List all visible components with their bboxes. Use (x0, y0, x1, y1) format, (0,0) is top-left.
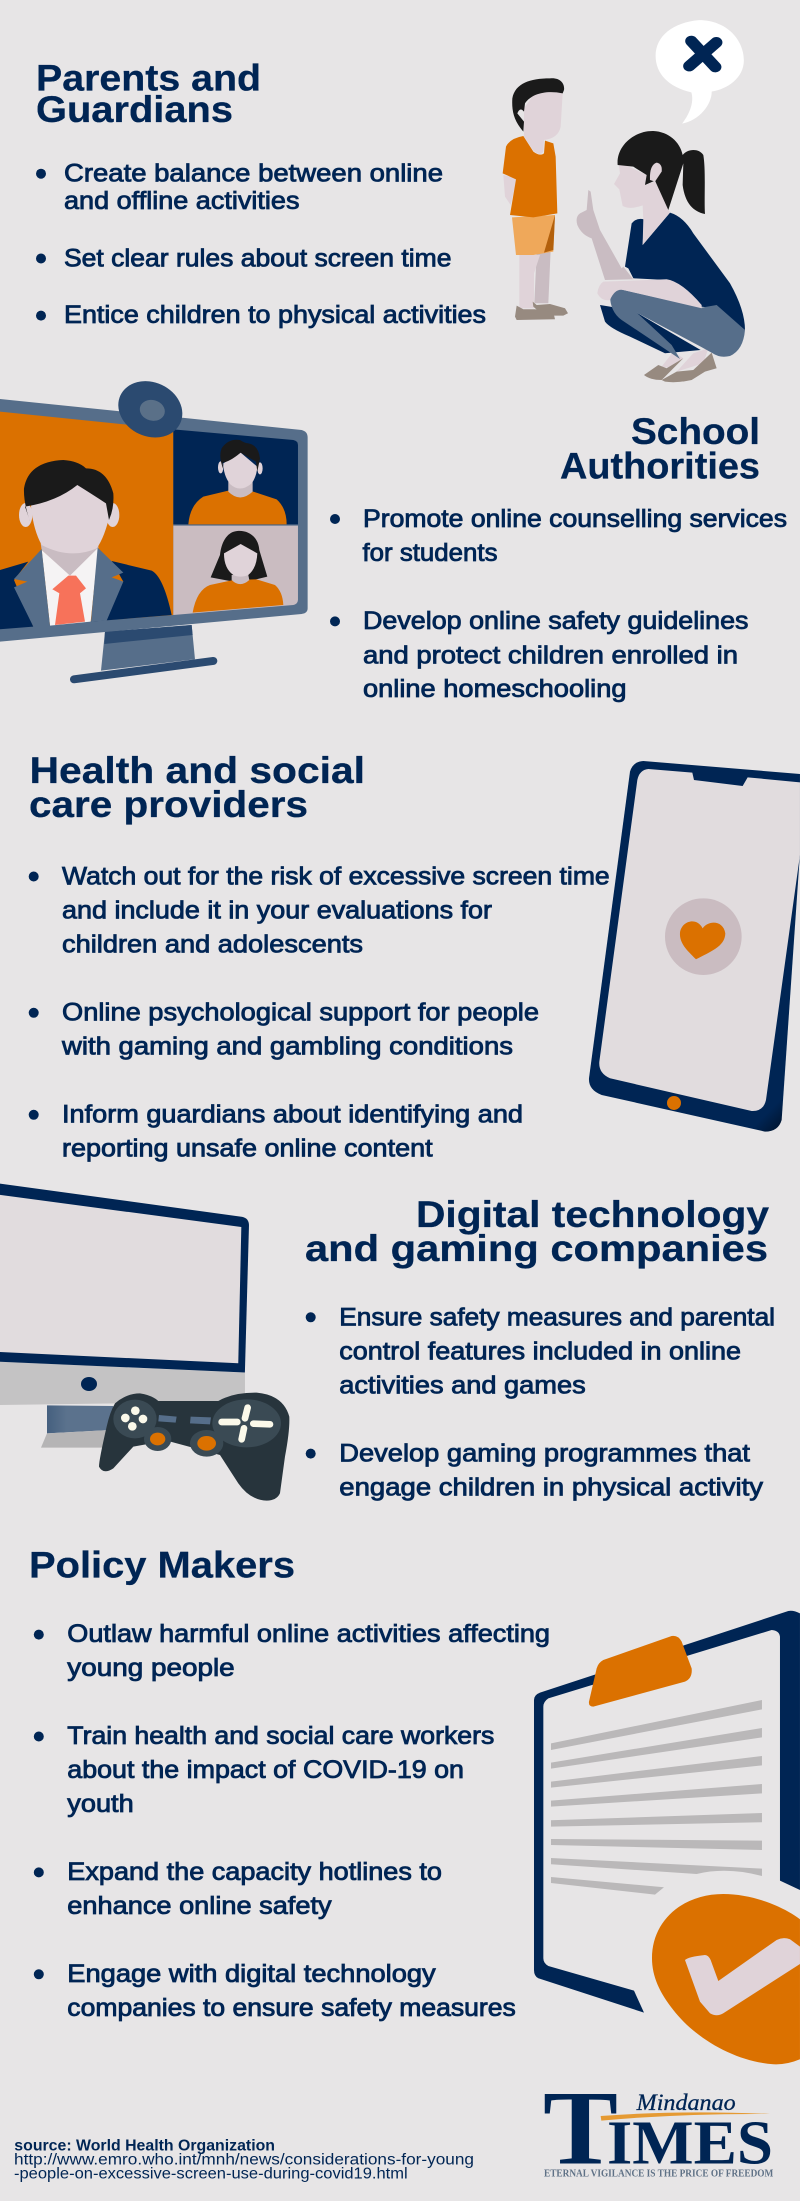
bullet: create balance: and offline activities (64, 187, 300, 215)
heading: parents and guardians: Parents and (36, 58, 261, 99)
bullet: screen time rules: Set clear rules about screen time (64, 244, 452, 272)
heading: digital technology and gaming companies (305, 1194, 769, 1269)
man in suit (0, 460, 172, 629)
bullet: expand hotlines: enhance online safety (67, 1892, 332, 1920)
logo: Mindanao Times: T (543, 2069, 618, 2186)
bullet: gaming programmes: engage children in physical activity (339, 1473, 764, 1501)
heading: parents and guardians: Guardians (36, 89, 233, 130)
heading: digital technology and gaming companies: Digital technology (416, 1194, 769, 1235)
heading: digital technology and gaming companies: and gaming companies (305, 1228, 768, 1269)
bullet: outlaw harmful activities (34, 1620, 550, 1682)
source credit (14, 2137, 474, 2183)
bullet: psychological support: Online psychological support for people (62, 998, 539, 1026)
illustration: smartphone with heart (589, 761, 800, 1132)
bullet: expand hotlines (34, 1858, 442, 1920)
heading: health and social care providers (29, 750, 365, 825)
bullet: create balance (36, 159, 443, 215)
bullet: online counselling (330, 505, 787, 567)
heading: parents and guardians (36, 58, 261, 130)
participant top (188, 440, 287, 524)
bullet: engage companies: Engage with digital technology (67, 1960, 436, 1988)
bullet: expand hotlines: Expand the capacity hotlines to (67, 1858, 442, 1886)
bullet: excessive screen time: and include it in your evaluations for (62, 896, 492, 924)
panel: health and social care providers (29, 750, 610, 1163)
bullet: inform guardians (29, 1100, 523, 1163)
icon: speech bubble with X (656, 20, 744, 124)
bullet: online counselling: Promote online counselling services (363, 505, 787, 533)
bullet: excessive screen time (29, 863, 610, 958)
bullet: safety guidelines (330, 607, 748, 703)
bullet: train workers: about the impact of COVID-19 on (67, 1756, 464, 1784)
participant bottom (193, 531, 283, 613)
bullet: inform guardians: Inform guardians about identifying and (62, 1100, 523, 1128)
bullet: psychological support (29, 998, 539, 1061)
bullet: create balance: Create balance between online (64, 159, 443, 187)
heading: health and social care providers: care providers (29, 784, 308, 825)
source credit: source: World Health Organization (14, 2137, 275, 2154)
logo: Mindanao Times: Mindanao (636, 2090, 736, 2115)
bullet: parental control: control features included in online (339, 1338, 741, 1366)
bullet: parental control: Ensure safety measures and parental (339, 1304, 775, 1332)
bullet: safety guidelines: online homeschooling (363, 675, 626, 703)
heading: school authorities: Authorities (560, 446, 760, 487)
bullet: train workers: youth (67, 1790, 134, 1818)
heading: school authorities (560, 411, 760, 487)
icon: game controller (99, 1393, 289, 1501)
logo: Mindanao Times: ETERNAL VIGILANCE IS THE PRICE OF FREEDOM (544, 2169, 774, 2180)
bullet: excessive screen time: Watch out for the risk of excessive screen time (62, 863, 610, 891)
logo: Mindanao Times (543, 2069, 774, 2186)
bullet: outlaw harmful activities: young people (67, 1654, 235, 1682)
bullet: inform guardians: reporting unsafe online content (62, 1135, 433, 1163)
heading: school authorities: School (631, 411, 760, 452)
source credit: -people-on-excessive-screen-use-during-covid19.html (14, 2166, 408, 2183)
bullet: train workers: Train health and social care workers (67, 1722, 494, 1750)
bullet: outlaw harmful activities: Outlaw harmful online activities affecting (67, 1620, 550, 1648)
panel: parents and guardians (36, 58, 486, 329)
illustration: crouching woman (577, 131, 745, 382)
illustration: video call monitor (0, 371, 308, 679)
heading: policy makers: Policy Makers (29, 1544, 295, 1585)
panel: school authorities (330, 411, 787, 703)
bullet: engage companies: companies to ensure safety measures (67, 1994, 516, 2022)
bullet: gaming programmes (306, 1440, 764, 1501)
bullet: safety guidelines: and protect children enrolled in (363, 641, 738, 669)
bullet: excessive screen time: children and adolescents (62, 930, 363, 958)
illustration: clipboard with check badge (534, 1611, 800, 2064)
logo: Mindanao Times: IMES (607, 2109, 773, 2177)
panel: digital technology and gaming companies (305, 1194, 775, 1501)
source credit: http://www.emro.who.int/mnh/news/considerations-for-young (14, 2152, 474, 2169)
bullet: engage companies (34, 1960, 516, 2022)
bullet: parental control: activities and games (339, 1371, 586, 1399)
panel: policy makers (29, 1544, 550, 2022)
heading: health and social care providers: Health and social (30, 750, 365, 791)
bullet: online counselling: for students (362, 539, 498, 567)
bullet: psychological support: with gaming and gambling conditions (61, 1033, 513, 1061)
illustration: desktop monitor (0, 1184, 249, 1448)
bullet: gaming programmes: Develop gaming programmes that (339, 1440, 750, 1468)
bullet: physical activities: Entice children to physical activities (64, 301, 486, 329)
bullet: safety guidelines: Develop online safety guidelines (363, 607, 748, 635)
bullet: train workers (34, 1722, 494, 1818)
bullet: parental control (306, 1304, 775, 1399)
illustration: boy (503, 78, 568, 320)
